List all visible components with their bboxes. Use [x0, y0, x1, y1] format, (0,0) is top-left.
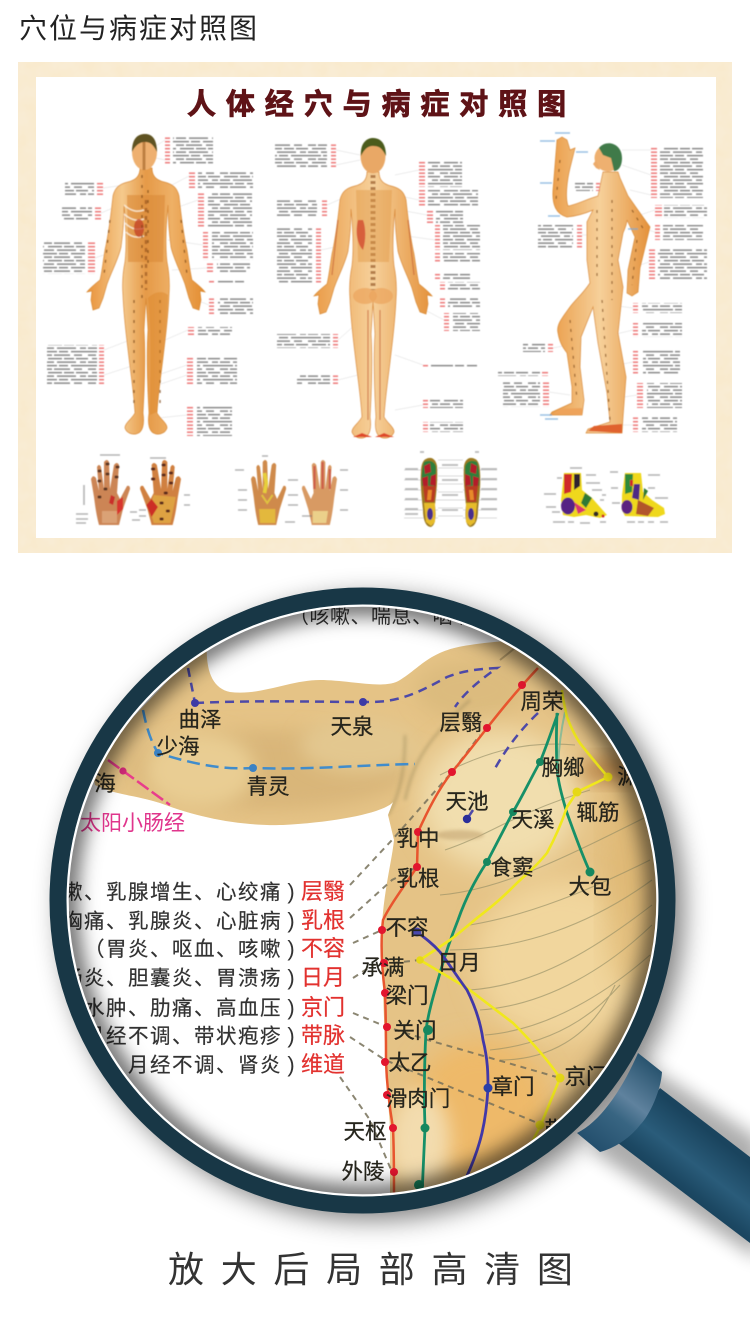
symptom list: 肠炎、胆囊炎、胃溃疡: [62, 967, 282, 990]
red point list: 不容: [301, 936, 345, 961]
caption: 放大后局部高清图: [168, 1249, 590, 1290]
poster frame: [18, 62, 732, 553]
point names: 辄筋: [576, 801, 620, 825]
lens inner shadow: [66, 604, 660, 1198]
symptom list: ): [287, 879, 295, 904]
leader lines: [549, 150, 655, 425]
point names: 天泉: [330, 715, 374, 739]
point names: 太乙: [388, 1051, 432, 1075]
meridian: red: [378, 668, 538, 1195]
point names: 周荣: [520, 690, 564, 714]
icon: hand 4: [302, 460, 337, 525]
meridian: pink: [108, 760, 170, 805]
symptom list: 水肿、肋痛、高血压: [84, 997, 282, 1020]
figure: side: [550, 137, 650, 433]
leader lines: [321, 150, 444, 410]
symptom list: 月经不调、带状疱疹: [84, 1025, 282, 1048]
point names: 乳中: [396, 827, 440, 851]
point names: 天枢: [343, 1120, 387, 1144]
symptom list: ): [287, 965, 295, 990]
coloured meridian tags: [540, 133, 638, 419]
page heading: 穴位与病症对照图: [19, 13, 259, 44]
red point list: 京门: [301, 995, 345, 1020]
reflex table lines: [404, 460, 497, 518]
point names: 乳根: [396, 867, 440, 891]
leader lines: [340, 735, 560, 1172]
icon: left sole: [421, 458, 437, 527]
clipped text at lens top: （咳嗽、喘息、咽喉痉: [289, 605, 494, 628]
magnifier collar: [577, 1053, 662, 1152]
meridian name: 太阳小肠经: [80, 812, 185, 835]
point names: 曲泽: [178, 708, 222, 732]
meridian: green: [414, 712, 594, 1195]
figure: back: [314, 138, 432, 438]
tiny labels: [542, 146, 662, 432]
meridian: yellow: [416, 690, 612, 1140]
point names: 青灵: [246, 775, 290, 799]
point names: 梁门: [385, 984, 429, 1008]
icon: hand 1: [91, 460, 130, 525]
point names: 带脉: [544, 1118, 588, 1142]
point names: 胸鄉: [541, 756, 585, 780]
point names: 食窦: [490, 856, 534, 880]
front body chart: [43, 134, 253, 436]
hand charts: [76, 455, 348, 525]
ribs: [440, 744, 652, 1060]
red point list: 乳根: [301, 908, 345, 933]
lens dark ring: [58, 596, 667, 1205]
lens view: [68, 607, 656, 1194]
symptom list: （胃炎、呕血、咳嗽: [84, 938, 282, 961]
symptom list: ): [287, 1052, 295, 1077]
symptom list: ): [287, 995, 295, 1020]
figure: front: [87, 134, 205, 434]
panel: magnifying glass: [18, 596, 750, 1260]
icon: hand 3: [251, 460, 286, 525]
meridian: navy: [412, 928, 492, 1178]
red point list: 层翳: [301, 879, 345, 904]
point names: 京门: [564, 1065, 608, 1089]
point names: 承满: [361, 956, 405, 980]
panel: acupoint poster: [18, 62, 732, 553]
magnifier handle: [618, 1088, 750, 1243]
meridian: purple dashed: [188, 668, 538, 823]
point names: 章门: [491, 1075, 535, 1099]
point names: 大包: [568, 875, 612, 899]
tiny labels: [544, 468, 668, 523]
point names: [94, 690, 639, 1184]
handle shadow: [590, 1060, 750, 1260]
icon: outer foot: [622, 473, 665, 517]
point names: 渊: [617, 765, 639, 789]
icon: hand 2: [140, 460, 181, 525]
lens white rim: [68, 606, 658, 1196]
point names: 天溪: [511, 808, 555, 832]
point names: 不容: [385, 916, 429, 940]
red point list: [301, 879, 345, 1077]
foot sole charts: [404, 452, 497, 527]
point names: 日月: [437, 951, 481, 975]
lens drop shadow: [60, 596, 684, 1220]
red point list: 带脉: [301, 1023, 345, 1048]
symptom list: 胸痛、乳腺炎、心脏病: [62, 910, 282, 933]
red point list: 维道: [301, 1052, 345, 1077]
tiny labels: [316, 144, 449, 432]
point names: 层翳: [439, 711, 483, 735]
symptom list: [68, 881, 294, 1076]
point names: 外陵: [341, 1160, 385, 1184]
point names: 少海: [156, 735, 200, 759]
icon: inner foot: [561, 473, 607, 518]
point names: 关门: [393, 1019, 437, 1043]
tiny labels: [76, 455, 348, 523]
meridian: light blue dashed: [143, 710, 415, 772]
skin area: [94, 642, 656, 1193]
ankle foot charts: [544, 468, 668, 523]
point names: 天池: [445, 790, 489, 814]
icon: right sole: [464, 458, 480, 527]
red point list: 日月: [301, 965, 345, 990]
symptom list: （咳嗽、乳腺增生、心绞痛: [18, 881, 282, 904]
symptom list: ): [287, 1023, 295, 1048]
symptom list: ): [287, 936, 295, 961]
symptom list: ): [287, 908, 295, 933]
side body chart: [498, 133, 707, 433]
tiny labels: [88, 137, 214, 436]
point names: 滑肉门: [386, 1087, 450, 1111]
point names: 海: [94, 772, 116, 796]
symptom list: 月经不调、肾炎: [128, 1054, 282, 1077]
leader lines: [95, 140, 209, 418]
back body chart: [275, 138, 480, 438]
poster title: 人体经穴与病症对照图: [187, 88, 576, 121]
